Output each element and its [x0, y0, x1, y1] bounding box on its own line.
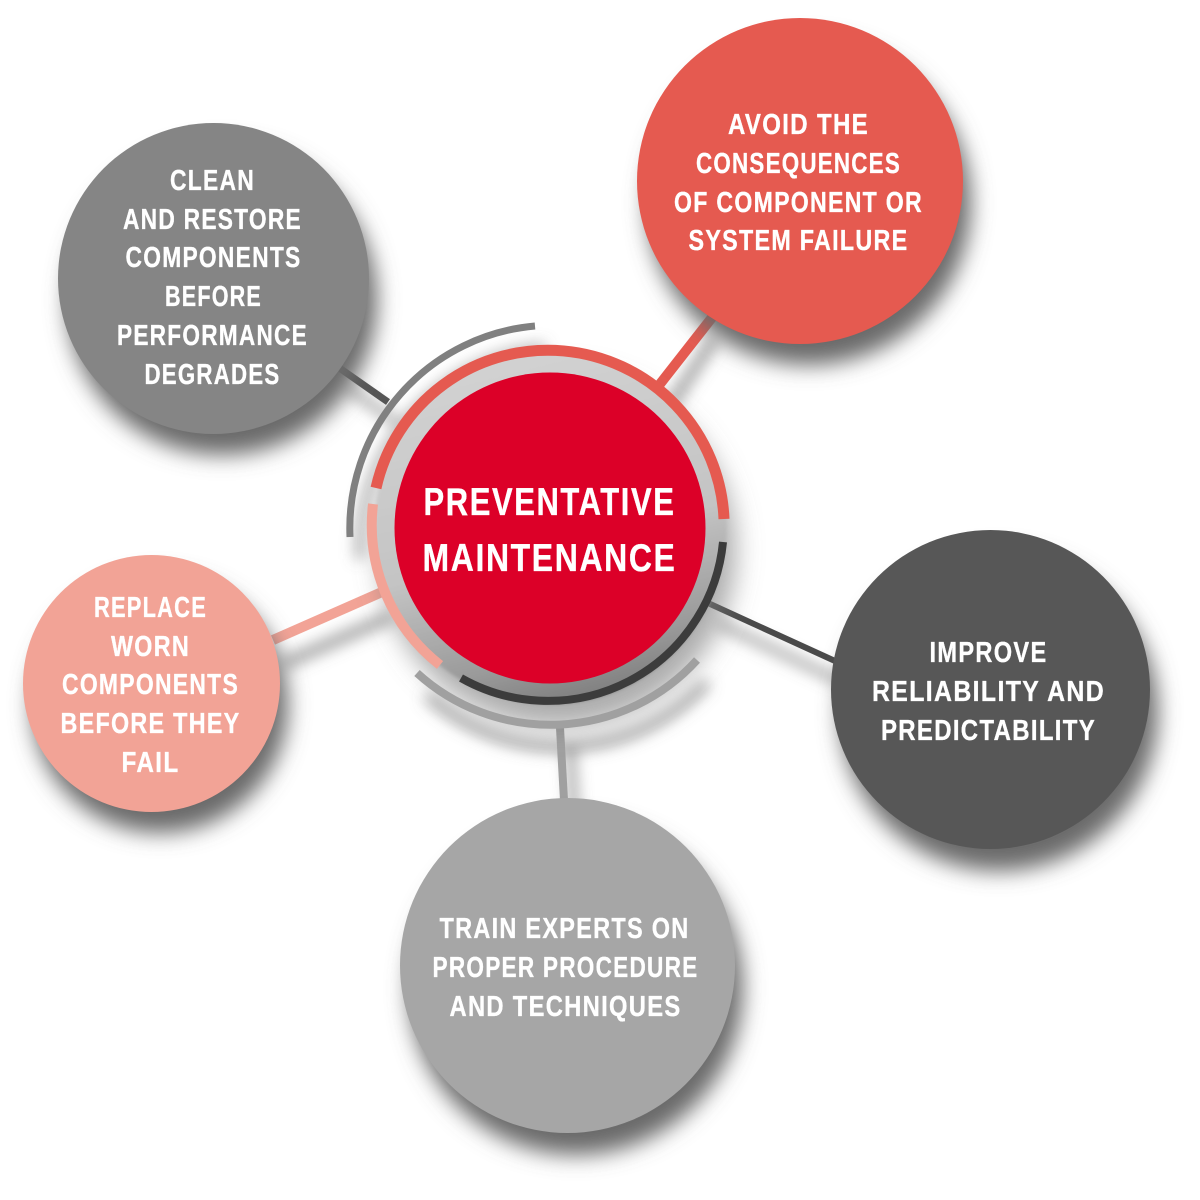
- connector: train experts: [560, 728, 564, 800]
- panel: avoid the consequences: OF COMPONENT OR: [674, 187, 923, 219]
- connector: avoid consequences: [660, 315, 714, 384]
- panel: train experts: [400, 798, 743, 1155]
- panel: replace worn components: WORN: [111, 631, 190, 663]
- panel: improve reliability: RELIABILITY AND: [872, 676, 1105, 708]
- panel: replace worn components: FAIL: [122, 747, 180, 779]
- panel: avoid the consequences: CONSEQUENCES: [696, 148, 901, 180]
- panel: clean and restore components: PERFORMANCE: [117, 320, 308, 352]
- connector: improve reliability: [708, 603, 835, 661]
- panel: central hub: [350, 326, 736, 728]
- panel: clean and restore components: CLEAN: [170, 165, 255, 197]
- panel: clean and restore components: DEGRADES: [144, 359, 280, 391]
- panel: clean and restore components: BEFORE: [165, 281, 262, 313]
- panel: improve reliability: PREDICTABILITY: [881, 715, 1096, 747]
- panel: replace worn components: BEFORE THEY: [60, 708, 240, 740]
- panel: central hub: PREVENTATIVE: [424, 481, 676, 524]
- panel: clean and restore components: AND RESTORE: [123, 204, 302, 236]
- panel: train experts: AND TECHNIQUES: [450, 991, 682, 1023]
- connector: clean and restore: [338, 367, 388, 402]
- connector: replace worn components: [273, 592, 382, 640]
- panel: avoid the consequences: [637, 18, 971, 365]
- panel: avoid the consequences: SYSTEM FAILURE: [688, 225, 908, 257]
- panel: clean and restore components: COMPONENTS: [126, 242, 302, 274]
- panel: train experts: PROPER PROCEDURE: [432, 952, 698, 984]
- panel: avoid the consequences: AVOID THE: [728, 109, 869, 141]
- panel: train experts: TRAIN EXPERTS ON: [440, 913, 690, 945]
- panel: improve reliability: IMPROVE: [930, 637, 1048, 669]
- panel: replace worn components: [23, 555, 288, 833]
- panel: clean and restore components: [58, 123, 377, 455]
- panel: central hub: MAINTENANCE: [422, 537, 676, 580]
- panel: replace worn components: REPLACE: [94, 592, 207, 624]
- panel: replace worn components: COMPONENTS: [62, 669, 239, 701]
- panel: improve reliability: [831, 530, 1158, 871]
